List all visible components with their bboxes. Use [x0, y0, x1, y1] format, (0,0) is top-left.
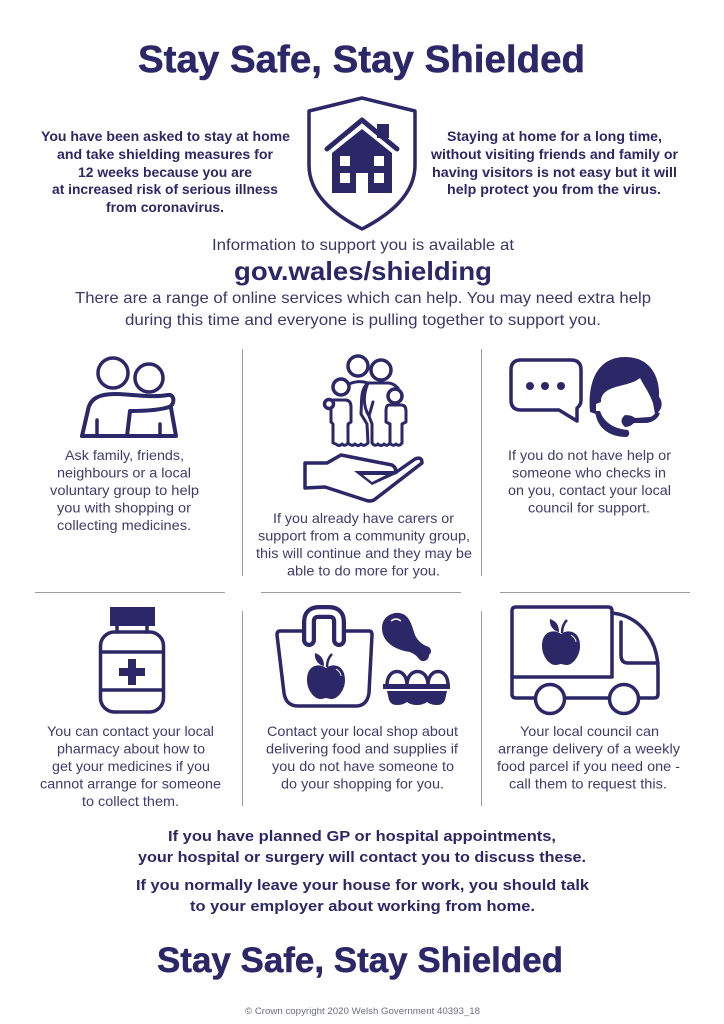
text block: staying at home: without visiting friends and family or [430, 147, 679, 162]
web address: gov.wales/shielding [234, 256, 492, 286]
text block: online services: during this time and everyone is pulling together to support you. [125, 312, 601, 329]
caption: delivering food and supplies if [266, 740, 458, 756]
caption: you with shopping or [57, 500, 191, 516]
caption: You can contact your local [47, 723, 214, 739]
caption: able to do more for you. [287, 562, 440, 578]
icon: medicine bottle [100, 607, 164, 712]
caption: Contact your local shop about [267, 723, 458, 739]
panel: food parcel [497, 607, 680, 792]
panel: carers and community [256, 356, 472, 578]
caption: If you do not have help or [508, 447, 671, 463]
text block: asked to stay at home: 12 weeks because you are [78, 165, 253, 180]
icon: egg box [383, 672, 450, 705]
caption: someone who checks in [512, 464, 666, 480]
text block: work: to your employer about working from home. [190, 898, 535, 915]
caption: get your medicines if you [52, 758, 210, 774]
caption: support from a community group, [258, 528, 470, 544]
caption: council for support. [528, 500, 650, 516]
caption: Your local council can [520, 723, 659, 739]
icon: two people embracing [82, 358, 176, 436]
caption: arrange delivery of a weekly [498, 740, 680, 756]
text block: online services [75, 290, 651, 329]
caption: collecting medicines. [57, 517, 191, 533]
caption: to collect them. [82, 793, 179, 809]
text block: staying at home: Staying at home for a long time, [447, 129, 662, 144]
text block: staying at home [430, 129, 679, 197]
caption: voluntary group to help [50, 482, 199, 498]
caption: cannot arrange for someone [40, 776, 221, 792]
text block: work [136, 877, 590, 915]
text block: appointments: If you have planned GP or hospital appointments, [168, 828, 556, 845]
caption [256, 510, 472, 578]
caption [497, 723, 680, 792]
text: information intro: Information to support you is available at [212, 237, 515, 254]
caption: neighbours or a local [57, 464, 191, 480]
caption [266, 723, 458, 792]
text block: staying at home: having visitors is not easy but it will [432, 165, 677, 180]
icon: family above open hand [305, 356, 422, 501]
icon: house in shield [309, 98, 415, 229]
text block: online services: There are a range of online services which can help. You may need extra help [75, 290, 651, 307]
caption [508, 447, 671, 516]
text block: asked to stay at home: and take shielding measures for [57, 147, 274, 162]
text block: asked to stay at home [41, 129, 291, 215]
icon: chicken leg [382, 613, 431, 661]
caption: Ask family, friends, [65, 447, 184, 463]
caption: food parcel if you need one - [497, 758, 680, 774]
panel: local shop [266, 612, 458, 792]
text block: asked to stay at home: from coronavirus. [106, 200, 224, 215]
panel: contact council [508, 357, 671, 516]
icon: shopping bag with apple [277, 612, 372, 706]
closing heading: Stay Safe, Stay Shielded [157, 941, 563, 980]
panel: family and friends [50, 358, 199, 533]
icon: speech bubble and headset agent [511, 357, 662, 437]
text block: asked to stay at home: at increased risk of serious illness [52, 182, 278, 197]
caption: pharmacy about how to [57, 740, 205, 756]
text block: asked to stay at home: You have been asked to stay at home [41, 129, 291, 144]
caption: do your shopping for you. [281, 776, 444, 792]
icon: delivery truck [512, 607, 658, 714]
text block: appointments: your hospital or surgery will contact you to discuss these. [138, 849, 586, 866]
copyright line: © Crown copyright 2020 Welsh Government 40393_18 [245, 1006, 480, 1017]
panel: pharmacy [40, 607, 221, 809]
title: Stay Safe, Stay Shielded [138, 39, 585, 81]
caption [50, 447, 199, 533]
caption: you do not have someone to [272, 758, 454, 774]
text block: appointments [138, 828, 586, 866]
text block: staying at home: help protect you from the virus. [447, 182, 661, 197]
caption: on you, contact your local [508, 482, 671, 498]
caption [40, 723, 221, 809]
caption: call them to request this. [509, 776, 667, 792]
caption: this will continue and they may be [256, 545, 472, 561]
text block: work: If you normally leave your house for work, you should talk [136, 877, 590, 894]
caption: If you already have carers or [273, 510, 454, 526]
